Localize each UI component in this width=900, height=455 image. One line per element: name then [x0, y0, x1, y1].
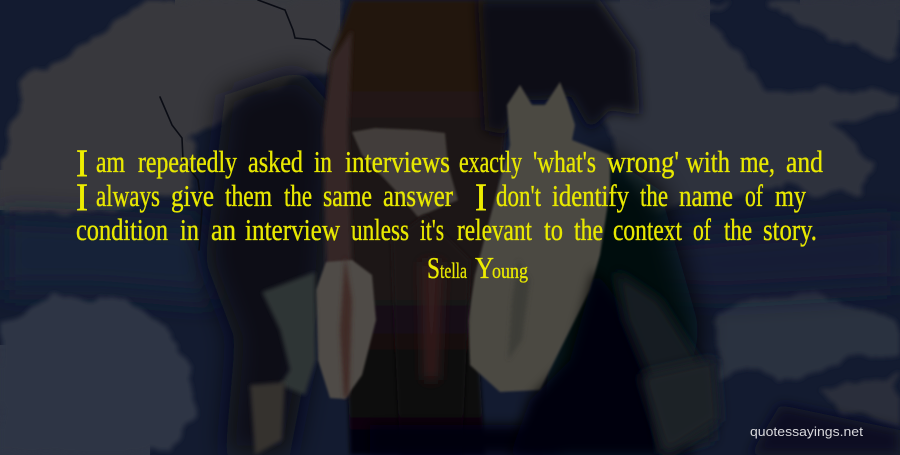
hair strands falling over the chest [392, 215, 470, 455]
line 1: and [786, 144, 823, 179]
line 3: of [693, 212, 711, 247]
cracks [160, 0, 330, 250]
line 2: I [76, 176, 88, 219]
lower-left sleeve shards [262, 272, 316, 395]
line 3 [76, 212, 817, 247]
line 1: interviews [345, 144, 450, 179]
line 2: give [171, 178, 214, 213]
line 3: relevant [457, 212, 532, 247]
line 1 [76, 142, 823, 185]
line 2: the [640, 178, 668, 213]
line 2: don't [496, 178, 541, 213]
line 2: answer [383, 178, 454, 213]
line 3: it's [420, 212, 444, 247]
line 1: asked [248, 144, 303, 179]
author attribution: S [427, 250, 440, 285]
left hand [316, 260, 376, 399]
line 2: identify [552, 178, 629, 213]
black fringe [478, 0, 640, 135]
line 3: in [180, 212, 199, 247]
line 3: context [613, 212, 682, 247]
author attribution: tella [440, 258, 467, 283]
line 1: exactly [459, 144, 522, 179]
line 2: them [225, 178, 272, 213]
line 3: condition [76, 212, 168, 247]
line 3: the [574, 212, 603, 247]
line 3: interview [245, 212, 340, 247]
right hand and forearm [468, 82, 610, 392]
line 1: I [76, 142, 88, 185]
author attribution [427, 250, 528, 285]
line 1: me, [740, 144, 775, 179]
quote text [76, 142, 823, 247]
side lock of hair [323, 30, 352, 270]
line 2: name [679, 178, 733, 213]
line 1: wrong' [607, 144, 679, 179]
line 3: to [544, 212, 563, 247]
dress [510, 270, 690, 455]
dark shadow around the figure [205, 70, 900, 455]
line 3: unless [351, 212, 409, 247]
watermark: quotessayings.net [750, 424, 863, 439]
line 2 [76, 176, 806, 219]
line 2: the [284, 178, 312, 213]
line 2: I [475, 176, 487, 219]
line 1: am [96, 144, 125, 179]
line 1: in [314, 144, 332, 179]
line 3: story. [763, 212, 817, 247]
line 2: my [775, 178, 806, 213]
figure: hair, face and hands [250, 0, 720, 455]
face [352, 128, 458, 217]
line 3: the [724, 212, 752, 247]
author attribution: Y [475, 250, 494, 285]
brown hair [325, 0, 505, 455]
line 2: same [323, 178, 372, 213]
line 2: of [745, 178, 763, 213]
author attribution: oung [492, 258, 528, 283]
line 3: an [211, 212, 236, 247]
line 1: with [686, 144, 730, 179]
line 1: repeatedly [138, 144, 237, 179]
line 2: always [96, 178, 160, 213]
line 1: 'what's [533, 144, 596, 179]
